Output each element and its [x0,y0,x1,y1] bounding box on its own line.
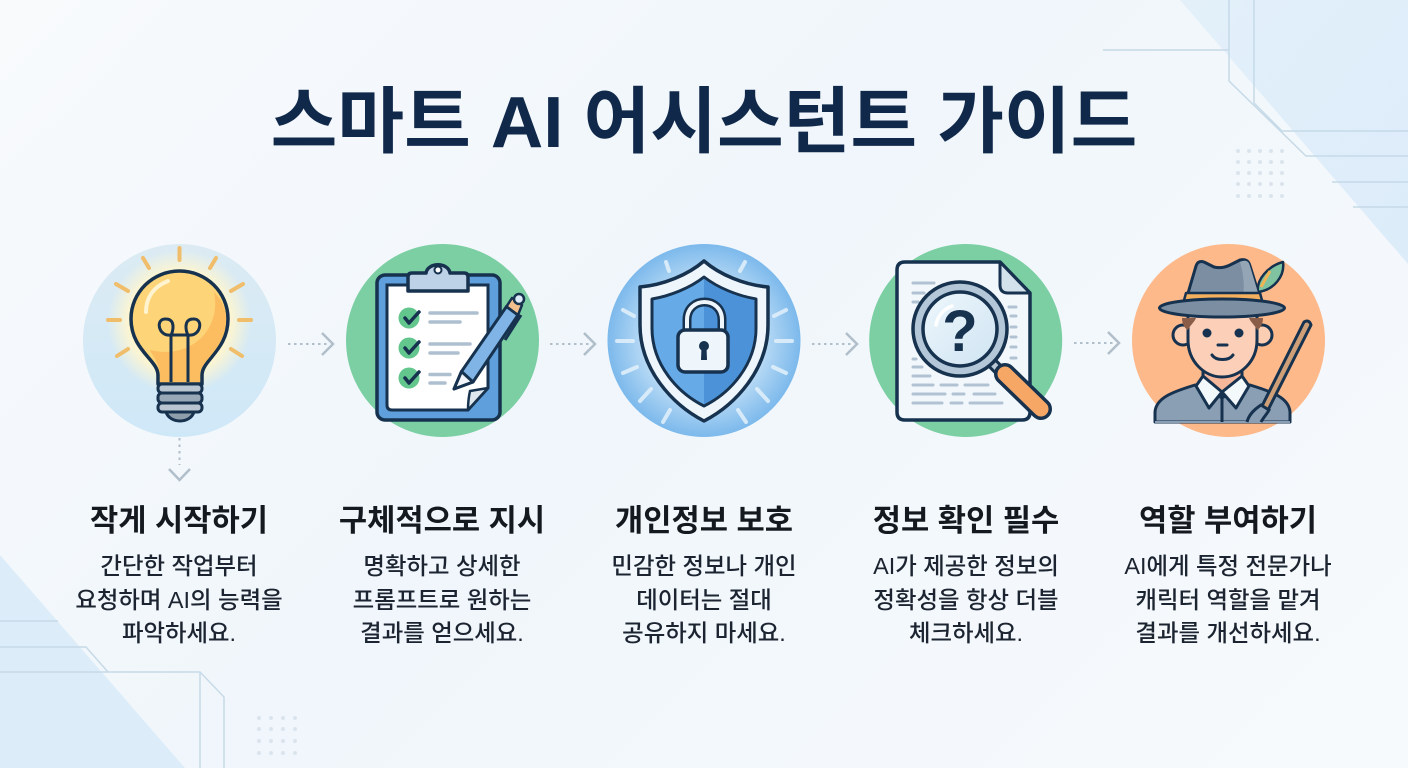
description: step 1: 파악하세요. [122,620,236,646]
heading: step 4: 정보 확인 필수 [873,503,1059,538]
description: step 4: 정확성을 항상 더블 [873,586,1059,612]
description: step 4: AI가 제공한 정보의 [873,553,1059,579]
description: step 2: 결과를 얻으세요. [360,620,524,646]
description: step 5 [1124,553,1332,646]
description: step 5: AI에게 특정 전문가나 [1124,553,1332,579]
description: step 3: 민감한 정보나 개인 [611,553,797,579]
description: step 4: 체크하세요. [909,620,1023,646]
arrow: step 4 to 5 [1074,332,1119,354]
description: step 2: 명확하고 상세한 [363,553,521,579]
description: step 1: 요청하며 AI의 능력을 [75,586,283,612]
step 3 text [611,503,797,646]
heading: step 2: 구체적으로 지시 [339,503,545,538]
description: step 3: 공유하지 마세요. [622,620,786,646]
description: step 4 [873,553,1059,646]
description: step 2: 프롬프트로 원하는 [353,586,531,612]
icon: clipboard with pen [346,244,539,437]
icon: document with magnifier [869,244,1062,437]
arrow: step 2 to 3 [550,333,595,355]
arrow: down from step 1 [169,438,190,480]
arrow: step 3 to 4 [812,333,857,355]
step 1 text [75,503,283,646]
description: step 5: 캐릭터 역할을 맡겨 [1135,586,1321,612]
step 2 text [339,503,545,646]
step 5 text [1124,503,1332,646]
step 4 text [873,503,1059,646]
heading: step 1: 작게 시작하기 [90,503,268,538]
description: step 3 [611,553,797,646]
description: step 1 [75,553,283,646]
description: step 1: 간단한 작업부터 [100,553,258,579]
arrow: step 1 to 2 [288,333,333,355]
description: step 3: 데이터는 절대 [636,586,772,612]
title: 스마트 AI 어시스턴트 가이드 [271,82,1137,163]
icon: shield with padlock [608,244,800,437]
icon: document with magnifier: ? [942,299,978,364]
description: step 5: 결과를 개선하세요. [1135,620,1321,646]
heading: step 3: 개인정보 보호 [615,503,793,538]
icon: character with hat and stick [1132,244,1325,437]
icon: light bulb [83,244,276,437]
heading: step 5: 역할 부여하기 [1139,503,1317,538]
description: step 2 [353,553,531,646]
